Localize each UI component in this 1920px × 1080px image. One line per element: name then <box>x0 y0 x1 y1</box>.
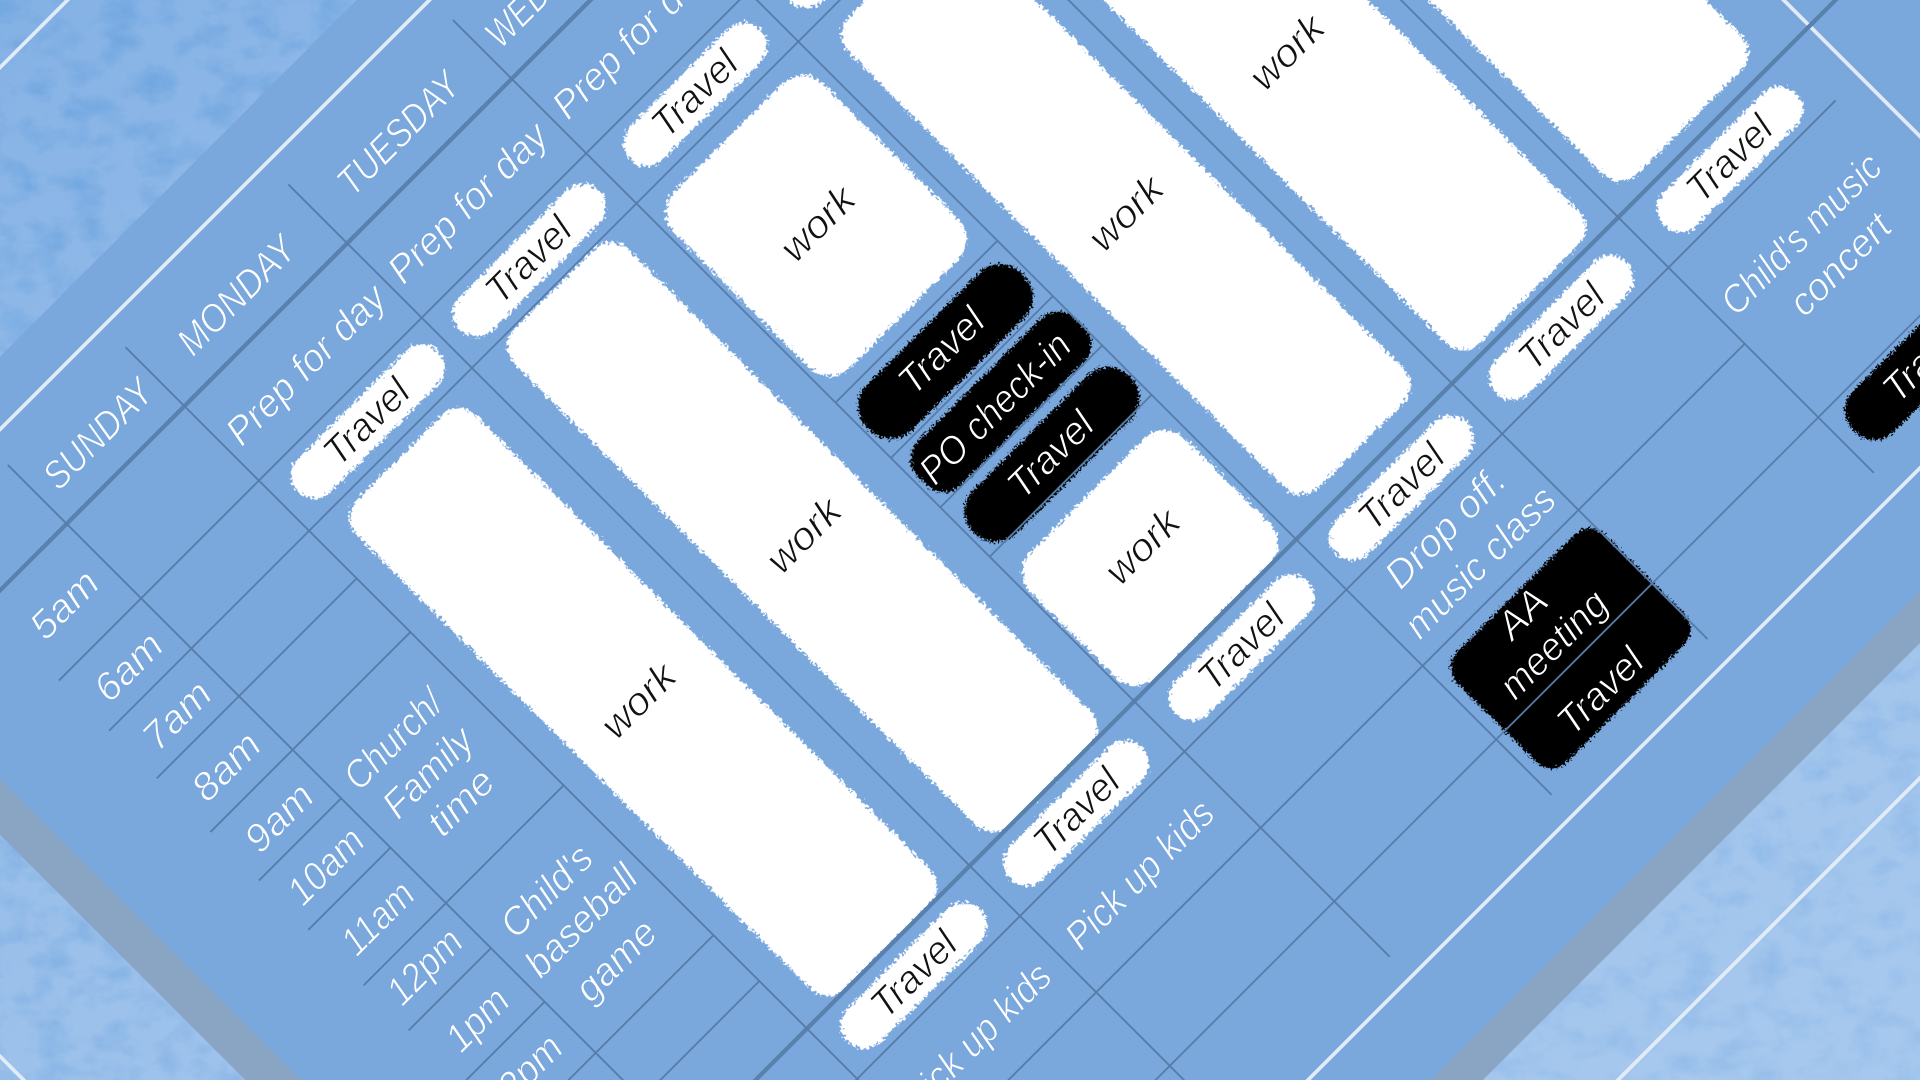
time labels: 8am <box>183 724 270 810</box>
time labels: 7am <box>134 673 221 759</box>
white work blocks <box>332 0 1771 1007</box>
time labels: 6am <box>85 624 172 711</box>
travel labels on white: Travel <box>1025 759 1130 864</box>
afternoon activities: Pick up kids <box>1057 792 1223 958</box>
work labels: work <box>1241 4 1336 99</box>
travel labels on white: Travel <box>1189 595 1294 699</box>
labels on black blocks: PO check-in <box>911 324 1080 493</box>
work labels <box>444 0 1510 922</box>
work labels: work <box>772 176 866 270</box>
day headings: MONDAY <box>169 226 307 364</box>
labels on black blocks: Travel <box>890 298 995 403</box>
labels on black blocks: AA <box>1487 579 1557 649</box>
afternoon activities: music class <box>1396 478 1565 647</box>
travel labels on white: Travel <box>862 922 967 1027</box>
labels on black blocks: meeting <box>1491 582 1617 708</box>
work labels: work <box>592 653 687 748</box>
Sunday activities: baseball <box>517 855 648 986</box>
travel labels on white: Travel <box>1350 434 1455 539</box>
morning prep labels: Prep for day <box>218 275 397 454</box>
travel labels on white: Travel <box>1510 274 1615 379</box>
black appointment blocks <box>846 0 1920 945</box>
time labels: 1pm <box>437 979 519 1061</box>
afternoon activities: concert <box>1781 204 1902 325</box>
day headings: TUESDAY <box>329 62 471 204</box>
white travel capsules <box>281 0 1812 1058</box>
time labels: 5am <box>21 562 108 648</box>
travel labels on white: Travel <box>477 208 582 312</box>
travel labels on white <box>312 0 1783 1027</box>
travel labels on white: Travel <box>315 369 420 474</box>
labels on black blocks: Travel <box>1549 639 1654 744</box>
work labels: work <box>1080 166 1174 260</box>
day headings: SUNDAY <box>35 369 164 498</box>
time labels: 9am <box>236 775 323 861</box>
Sunday activities: Family <box>374 717 484 827</box>
Sunday activities <box>332 671 685 1023</box>
Sunday activities: game <box>566 911 666 1011</box>
morning prep labels: Prep for day <box>379 113 559 292</box>
labels on black blocks: Travel <box>999 402 1104 507</box>
Sunday activities: Child's <box>492 837 602 947</box>
travel labels on white: Travel <box>1678 106 1783 211</box>
work labels: work <box>758 488 852 582</box>
afternoon activities: Child's music <box>1712 145 1891 324</box>
time labels <box>17 558 576 1080</box>
morning prep labels <box>218 0 723 454</box>
Sunday activities: Church/ <box>335 679 455 799</box>
Sunday activities: time <box>419 760 504 845</box>
time labels: 11am <box>333 873 424 964</box>
day headings <box>35 0 652 498</box>
work labels: work <box>1096 499 1191 593</box>
labels on black blocks <box>856 0 1920 937</box>
time labels: 12pm <box>378 920 472 1014</box>
time labels: 10am <box>279 819 373 914</box>
afternoon activities <box>873 114 1920 1080</box>
travel labels on white: Travel <box>643 41 748 146</box>
afternoon activities: Drop off. <box>1376 459 1515 597</box>
